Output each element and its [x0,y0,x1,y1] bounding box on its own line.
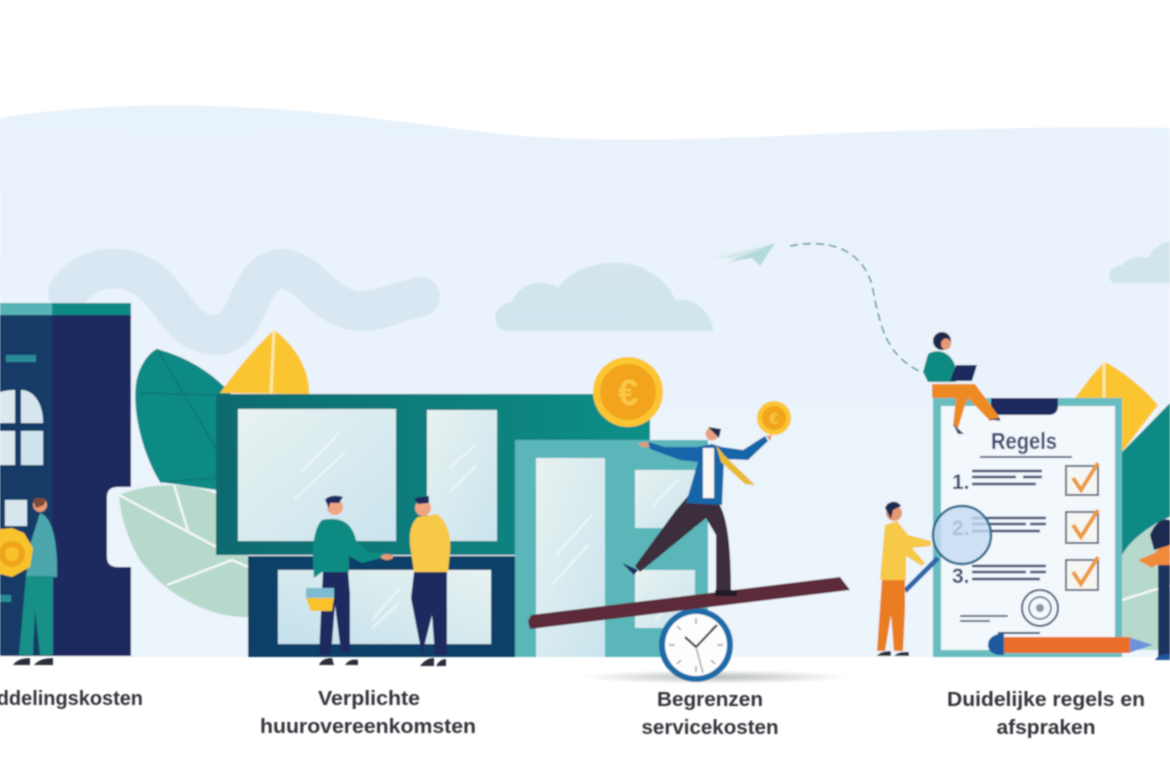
hair [325,496,343,508]
leaf: yellow left [220,330,309,394]
hair [708,427,721,438]
hair and head [1150,519,1170,550]
head [327,499,343,515]
lower navy frame [248,556,515,657]
lower window [278,570,491,644]
caption: Duidelijke regels en afspraken [947,689,1145,739]
bag [306,588,334,611]
dashed flight path [790,244,921,372]
jacket and arms [648,436,768,505]
panel: Begrenzen servicekosten [528,357,850,684]
person: man in yellow shirt [410,496,450,666]
tie [716,445,755,485]
leaf: pale green right [1122,520,1170,650]
paper plane [715,243,775,266]
caption: Duidelijke regels en afspraken: afspraken [996,717,1096,739]
smoke cloud [68,269,420,335]
clock [659,608,733,682]
heading Regels: Regels [991,428,1057,454]
hands [638,435,772,447]
building right facade [52,315,131,656]
rule 2: 2. [952,517,970,540]
shoes [420,658,446,666]
head [706,428,718,440]
side window top [635,470,695,528]
rule 1: 1. [952,471,970,494]
shoes [877,651,909,656]
magnifying glass lens [933,506,991,564]
hair [414,496,429,504]
caption: Begrenzen servicekosten: Begrenzen [657,689,763,711]
torso and arm [313,519,385,578]
leaf: yellow right [1075,362,1158,452]
light teal block [515,440,708,657]
caption: Verplichte huurovereenkomsten: Verplichte [318,688,420,710]
caption: Verplichte huurovereenkomsten: huurovereenkomsten [260,716,476,738]
laptop [950,365,977,381]
shoes [622,563,638,575]
leaf veins teal [140,349,217,482]
rule 3: 3. [952,565,970,588]
rule 2 [952,510,1098,543]
hair [885,502,901,519]
cloud right [1109,242,1170,283]
background sky wave [0,106,1170,657]
balancing businessman [622,427,772,596]
magnifier handle [905,558,938,591]
legs [319,570,350,655]
leaf vein yellow right [1102,362,1106,398]
roof [0,303,131,315]
face [941,338,951,350]
legs [411,572,447,655]
signature lines [960,616,1008,621]
seesaw plank [528,577,850,629]
leaf vein yellow [271,330,274,394]
leaf: teal left [135,349,232,490]
ground shadow [580,670,850,684]
hand [381,554,393,560]
panel: Duidelijke regels en afspraken clipboard [933,398,1153,657]
small euro coin: € [770,411,779,428]
head [886,505,902,521]
trousers [1158,565,1170,658]
window small [427,410,497,541]
paper [941,406,1115,650]
rule 3 [952,557,1098,590]
small euro coin [757,401,791,435]
person holding money bag [0,498,57,665]
heading underline [980,456,1072,458]
shirt [410,514,450,572]
window large [238,409,396,541]
stamp [1022,590,1058,626]
leaf: pale green left [119,485,248,617]
tall door window [536,458,605,657]
rule 1 [952,463,1098,495]
leaf veins pale green [119,485,248,585]
top [1138,542,1170,568]
caption: Begrenzen servicekosten [642,689,778,739]
leaf: teal right [1122,403,1170,555]
board [933,398,1122,657]
torso [923,351,956,382]
panel: Bemiddelingskosten building [0,303,131,665]
person: woman at right [1138,519,1170,660]
trousers [635,496,731,590]
head [415,500,431,516]
person: woman with laptop [923,332,1000,434]
hair [933,332,951,350]
cloud centre [495,263,713,331]
person: man in teal sweater [306,496,393,665]
window [0,355,43,602]
large euro coin [593,357,663,427]
clip [991,398,1058,415]
trousers [877,579,905,651]
shoes [953,418,1000,434]
large euro coin: € [618,372,638,413]
shoes [319,658,358,665]
building left facade [0,315,53,656]
caption: Begrenzen servicekosten: servicekosten [642,717,778,739]
caption: Verplichte huurovereenkomsten [260,688,476,738]
panel: Verplichte huurovereenkomsten building [216,394,708,657]
seat and legs [932,384,1000,428]
shirt [703,448,714,498]
shirt [880,521,931,580]
caption: Duidelijke regels en afspraken: Duidelijke regels en [947,689,1145,711]
person: man with magnifier [877,502,938,656]
pencil [988,632,1153,655]
upper frame [216,394,650,555]
side window bottom [635,570,695,628]
glass reflections [294,432,680,628]
leaf veins right [1122,585,1170,600]
shoe [1155,654,1170,660]
